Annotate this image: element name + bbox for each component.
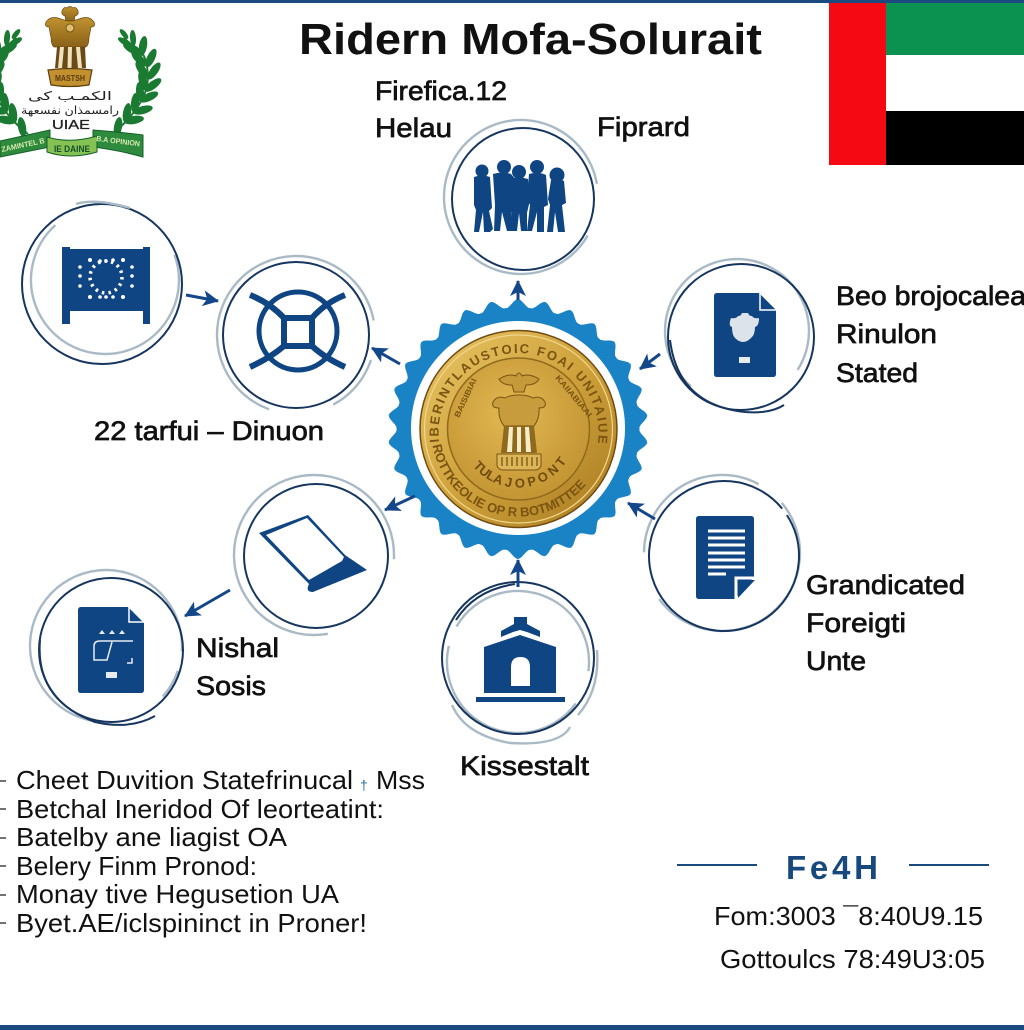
arrow: seal to book [385,496,415,510]
emblem text line one: الكمـب كى [28,89,112,103]
list line 2: Betchal Ineridod Of leorteatint: [16,794,384,824]
icon: book [259,515,367,592]
lion wheel [66,24,74,32]
crown [62,6,78,22]
emblem text line two: رامسمذان نفسعهة [21,105,119,117]
ribbon right text: B.A OPINION [96,134,141,148]
label: Foreigti: Foreigti [806,608,906,638]
icon: board with dots [62,247,150,324]
label: Nishal: Nishal [196,633,279,663]
emblem UIAE: UIAE [52,117,90,132]
lions [45,18,95,47]
circle: book [221,462,407,648]
ring [221,462,407,648]
ribbon right [93,130,143,157]
label: Stated: Stated [836,358,918,388]
icon: passport booklet [714,293,776,377]
left laurel branch [0,28,28,138]
list line 1 end: Mss [376,765,425,795]
circle: building [421,565,615,759]
list line 6: Byet.AE/iclspininct in Proner! [16,908,367,938]
footer heading: Fe4H [786,849,878,886]
icon: emblem with wreath [0,6,163,157]
label: Unte: Unte [806,646,866,676]
ribbon left text: ZAMINTEL B [1,136,46,154]
central gold seal [388,300,648,559]
ribbon centre text: IE DAINE [54,144,90,154]
footer line 2: Gottoulcs 78:49U3:05 [720,944,985,974]
icon: people silhouettes [474,160,566,232]
ribbon centre [47,136,97,156]
arrow: seal to people [516,281,520,300]
label: Grandicated: Grandicated [806,570,965,600]
columns [55,47,86,68]
icon: document [696,516,757,599]
circle: passport [636,230,838,432]
top-left labels [375,76,507,143]
icon: UAE flag [829,3,1024,165]
label: Sosis: Sosis [196,671,266,701]
top bar [0,0,1024,3]
ring [416,92,626,302]
coin bottom inscription: ROTTKEOLIE OP R BOTMITTEE [432,444,586,516]
footer divider lines [677,864,989,866]
label: Helau: Helau [375,113,452,143]
base [48,68,92,86]
title: Ridern Mofa-Solurait [299,15,762,64]
ring [18,558,194,734]
ring [421,565,615,759]
coin top inscription: IBERINTLAUSTOIC FOAI UNITAIUE [430,344,608,444]
arrow: seal to crossed square [372,348,400,364]
label: Rinulon: Rinulon [836,319,937,349]
coin capital emblem [493,373,545,470]
bullet list [0,765,425,938]
circle: board [10,185,200,375]
icon: building [476,617,565,702]
dagger mark: † [360,777,368,793]
base inscription: MASTSH [55,74,85,83]
label: Fiprard: Fiprard [597,112,690,142]
arrow: board to crossed square [186,295,218,301]
circle: people [416,92,626,302]
gold coin [419,330,618,528]
ribbon left [0,130,50,157]
arrow: passport to seal [640,354,660,369]
coin left small text: BAISIBIAI [453,377,479,419]
label: 22 tarfui – Dinuon: 22 tarfui – Dinuon [94,416,324,446]
coin right small text: KAIIABIAAI [553,374,594,419]
arrow: document to seal [628,503,655,519]
white ring [411,321,625,535]
ring [636,230,838,432]
arrow: book to file [185,590,230,616]
label: Kissestalt: Kissestalt [460,751,590,781]
footer line 1: Fom:3003 ¯8:40U9.15 [714,901,983,931]
icon: crossed square [250,292,345,370]
circle: document [612,443,832,663]
blue scalloped border [387,299,649,559]
circle: file [18,558,194,734]
list line 3: Batelby ane liagist OA [16,822,288,852]
list dashes [0,781,6,923]
right laurel branch [112,28,163,138]
arrow: building to seal [516,560,520,587]
icon: file [78,607,144,693]
ring [612,443,832,663]
circle: crossed square [195,234,397,436]
coin inner inscription: TULA J O P O N T [474,456,565,488]
ring [195,234,397,436]
label: Beo brojocalea: Beo brojocalea [836,281,1024,311]
bottom bar [0,1025,1024,1030]
label: Firefica.12: Firefica.12 [375,76,507,106]
list line 1: Cheet Duvition Statefrinucal [16,765,353,795]
list line 5: Monay tive Hegusetion UA [16,879,340,909]
ring [10,185,200,375]
footer block [677,849,989,974]
list line 4: Belery Finm Pronod: [16,851,257,881]
